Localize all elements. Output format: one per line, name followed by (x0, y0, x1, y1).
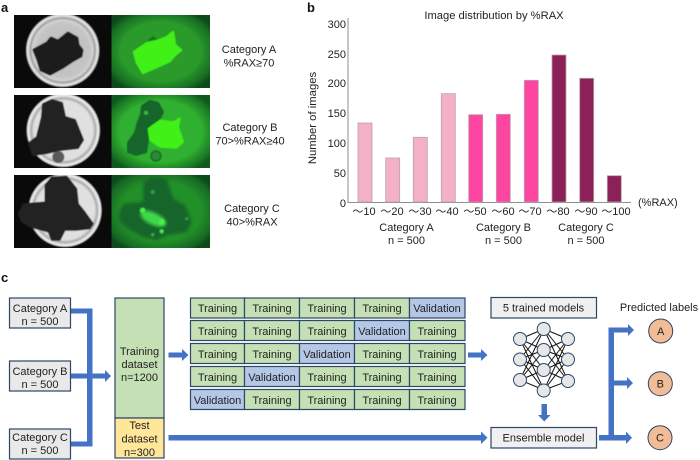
predicted label A (649, 319, 673, 343)
neural network icon (514, 322, 574, 397)
box: 5 trained models: 5 trained models (503, 302, 585, 314)
fold row 1: Training (362, 303, 402, 315)
x axis tick labels: ～50 (463, 206, 487, 218)
bars: category B (469, 80, 538, 202)
y axis title: Number of images (307, 72, 319, 164)
x axis tick labels: ～10 (352, 206, 376, 218)
group label: category B: Category B (476, 222, 531, 234)
fold row 2: Training (252, 326, 292, 338)
predicted label B: B (657, 379, 664, 391)
x axis tick labels: ～30 (408, 206, 432, 218)
caption: category C: Category C (224, 203, 280, 215)
y axis tick labels: 200 (328, 78, 346, 90)
panel b: bar chart of image distribution (307, 10, 678, 247)
y axis tick labels: 150 (328, 108, 346, 120)
fold row 1: Training (198, 303, 237, 315)
caption: category A: %RAX≥70 (224, 58, 274, 70)
fold row 2: Validation (358, 326, 406, 338)
fold row 4: Validation (248, 372, 296, 384)
group label: category B: n = 500 (485, 235, 522, 247)
panel a: microscopy images by category (14, 13, 210, 248)
panel c: workflow diagram (10, 298, 699, 459)
image row: category A (14, 13, 210, 88)
fold row 5: Training (417, 395, 457, 407)
fold row 2: Training (417, 326, 457, 338)
x axis tick labels: ～60 (491, 206, 515, 218)
panel label a: a (1, 0, 9, 15)
box: 5 trained models (491, 298, 596, 318)
fold row 5: Validation (194, 395, 241, 407)
arrow: trained models to ensemble (538, 404, 550, 422)
y axis tick labels: 0 (340, 198, 346, 210)
image row: category C (14, 173, 210, 248)
x axis tick labels: ～20 (380, 206, 404, 218)
input box: category C (10, 429, 70, 459)
arrow: folds to trained models (468, 349, 488, 361)
fold row 3: Training (417, 349, 457, 361)
group label: category C: Category C (558, 222, 614, 234)
predicted label A: A (657, 326, 665, 338)
fold row 2: Training (307, 326, 347, 338)
arrow: training dataset to folds (168, 349, 188, 361)
test dataset box: n=300 (124, 447, 155, 459)
predicted label B (648, 372, 672, 396)
x axis tick labels: ～70 (518, 206, 542, 218)
test dataset box: dataset (121, 434, 158, 446)
fold row 4: Training (362, 372, 402, 384)
input box: category B: n = 500 (21, 379, 59, 391)
x axis tick labels: ～40 (435, 206, 459, 218)
cross-validation table (190, 298, 465, 410)
connector: ensemble model to predicted labels (599, 324, 634, 444)
test dataset box (115, 418, 164, 459)
x axis tick labels: ～100 (601, 206, 631, 218)
x axis tick labels: ～80 (546, 206, 570, 218)
training dataset box: n=1200 (121, 372, 158, 384)
bars: category A (358, 94, 455, 202)
box: ensemble model (491, 428, 596, 448)
panel label c: c (1, 270, 8, 285)
test dataset box: Test (129, 420, 150, 432)
panel label b: b (307, 0, 315, 15)
predicted label C: C (656, 433, 664, 445)
fold row 1: Validation (413, 303, 461, 315)
input box: category B (10, 361, 70, 391)
y axis tick labels: 50 (334, 168, 346, 180)
fold row 4 (190, 366, 465, 386)
caption: category B: 70>%RAX≥40 (215, 136, 285, 148)
y axis tick labels: 100 (328, 138, 346, 150)
x axis tick labels (352, 206, 631, 218)
predicted label C (648, 426, 672, 450)
group label: category A: n = 500 (388, 235, 425, 247)
fold row 5: Training (362, 395, 402, 407)
image row: category B (14, 93, 210, 168)
training dataset box: dataset (121, 359, 158, 371)
fold row 2 (190, 320, 465, 340)
y axis tick labels: 250 (328, 49, 346, 61)
fold row 1: Training (307, 303, 347, 315)
group label: category A: Category A (379, 222, 434, 234)
input box: category C: Category C (12, 432, 68, 444)
fold row 3: Validation (303, 349, 351, 361)
arrow: test dataset to ensemble model (168, 432, 488, 444)
y axis tick labels (328, 19, 346, 210)
box: ensemble model: Ensemble model (503, 432, 584, 444)
input box: category A (10, 298, 70, 328)
fold row 1: Training (252, 303, 292, 315)
chart title: Image distribution by %RAX (424, 10, 564, 22)
fold row 4: Training (417, 372, 457, 384)
heading: predicted labels: Predicted labels (620, 302, 699, 314)
caption: category B: Category B (222, 122, 278, 134)
group label: category C: n = 500 (567, 235, 605, 247)
axes (348, 18, 631, 202)
input box: category A: n = 500 (21, 316, 59, 328)
fold row 5: Training (252, 395, 292, 407)
training dataset box (115, 298, 164, 418)
training dataset box: Training (120, 346, 159, 358)
x axis tick labels: ～90 (574, 206, 598, 218)
fold row 4: Training (307, 372, 347, 384)
fold row 5 (190, 390, 465, 410)
fold row 2: Training (198, 326, 237, 338)
fold row 3: Training (252, 349, 292, 361)
bars: category C (552, 55, 621, 202)
y axis tick labels: 300 (328, 19, 346, 31)
fold row 5: Training (307, 395, 347, 407)
input box: category A: Category A (13, 303, 68, 315)
input box: category C: n = 500 (21, 445, 59, 457)
connector: categories to training dataset (70, 308, 111, 446)
input box: category B: Category B (12, 366, 68, 378)
fold row 3 (190, 344, 465, 364)
x axis unit: (%RAX) (638, 197, 678, 209)
fold row 3: Training (198, 349, 237, 361)
fold row 4: Training (198, 372, 237, 384)
caption: category C: 40>%RAX (226, 216, 278, 228)
fold row 1 (190, 298, 465, 318)
caption: category A: Category A (222, 44, 277, 56)
fold row 3: Training (362, 349, 402, 361)
